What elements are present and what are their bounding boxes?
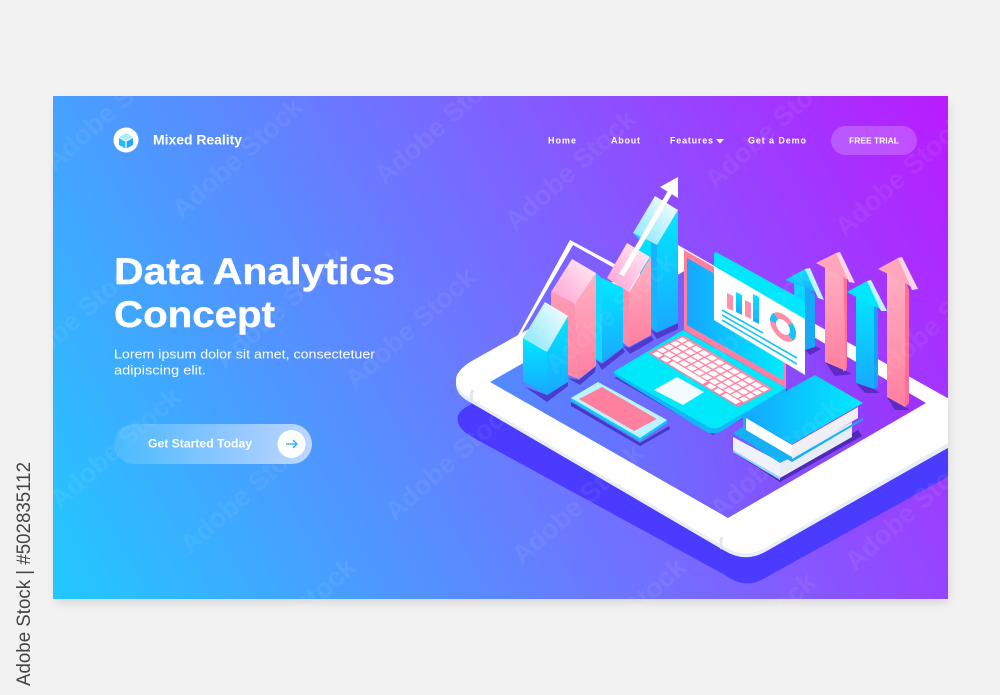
laptop screen bbox=[684, 250, 786, 388]
tablet shadow bbox=[458, 404, 948, 584]
trend line back bbox=[518, 240, 615, 335]
books bbox=[733, 375, 863, 482]
bar 1 bbox=[523, 302, 568, 395]
trend arrow bbox=[619, 177, 678, 276]
laptop shadow bbox=[615, 372, 790, 435]
mini text lines bbox=[722, 310, 797, 364]
watermarks: Adobe Stock bbox=[704, 391, 847, 524]
touchpad bbox=[654, 377, 704, 405]
watermarks: Adobe Stock bbox=[549, 551, 692, 684]
logo bbox=[114, 128, 243, 152]
icon: dropdown caret bbox=[716, 139, 724, 144]
tablet body bbox=[456, 245, 960, 557]
description: adipiscing elit. bbox=[114, 364, 206, 378]
upper book bbox=[743, 375, 863, 462]
book shadow bbox=[733, 430, 862, 482]
keyboard bbox=[648, 335, 773, 407]
button label: Get Started Today bbox=[148, 438, 253, 450]
panel shadow bbox=[56, 102, 948, 602]
icon: cube bbox=[119, 133, 133, 148]
navigation bbox=[548, 126, 917, 155]
nav: demo: Get a Demo bbox=[748, 136, 806, 146]
phone bbox=[571, 382, 670, 446]
arrow: cyan 2 bbox=[847, 280, 887, 389]
watermarks: Adobe Stock bbox=[4, 251, 147, 384]
bar chart bbox=[518, 177, 678, 402]
logo badge bbox=[114, 128, 138, 152]
bar 2 bbox=[551, 259, 596, 379]
title bbox=[114, 251, 395, 335]
nav: features: Features bbox=[670, 136, 713, 146]
watermarks: Adobe Stock bbox=[674, 261, 817, 394]
title: Data Analytics bbox=[114, 251, 395, 292]
arrows bbox=[785, 252, 918, 410]
watermarks: Adobe Stock bbox=[539, 246, 682, 379]
mini bar chart bbox=[727, 292, 759, 324]
bar 5 bbox=[633, 196, 678, 332]
arrow: cyan back bbox=[785, 268, 824, 350]
watermarks: Adobe Stock bbox=[174, 426, 317, 559]
watermarks: Adobe Stock bbox=[506, 437, 649, 570]
arrow: pink 2 bbox=[878, 257, 918, 407]
watermarks: Adobe Stock bbox=[699, 61, 842, 194]
bar shadows bbox=[525, 323, 678, 402]
watermarks: Adobe Stock bbox=[369, 57, 512, 190]
title: Concept bbox=[114, 294, 275, 335]
watermarks: Adobe Stock bbox=[379, 393, 522, 526]
watermarks: Adobe Stock bbox=[829, 109, 972, 242]
arrow: pink 1 bbox=[816, 252, 855, 372]
laptop bbox=[613, 250, 790, 435]
description bbox=[114, 348, 375, 378]
watermarks: Adobe Stock bbox=[219, 551, 362, 684]
panel: hero background bbox=[53, 96, 948, 599]
watermarks: Adobe Stock bbox=[499, 103, 642, 236]
watermarks: Adobe Stock bbox=[339, 261, 482, 394]
watermarks: Adobe Stock bbox=[44, 381, 187, 514]
watermarks: Adobe Stock bbox=[39, 43, 182, 176]
laptop base bbox=[614, 330, 786, 430]
stock id caption: Adobe Stock | #502835112 bbox=[14, 462, 35, 686]
free trial button bbox=[831, 126, 917, 155]
watermarks: Adobe Stock bbox=[839, 443, 982, 576]
description: Lorem ipsum dolor sit amet, consectetuer bbox=[114, 348, 375, 362]
arrow shadows bbox=[805, 346, 910, 410]
brand name: Mixed Reality bbox=[153, 132, 243, 148]
watermarks: Adobe Stock bbox=[209, 241, 352, 374]
illustration: isometric tablet with analytics objects bbox=[456, 177, 960, 583]
nav: home: Home bbox=[548, 136, 576, 146]
tablet screen bbox=[490, 266, 926, 518]
free trial button: FREE TRIAL bbox=[849, 136, 899, 146]
donut chart bbox=[773, 312, 793, 342]
nav: about: About bbox=[611, 136, 640, 146]
icon: arrow bbox=[278, 430, 306, 458]
dashboard card bbox=[714, 252, 805, 375]
call to action button bbox=[114, 424, 312, 464]
watermarks: Adobe Stock bbox=[166, 91, 309, 224]
bar 4 bbox=[607, 243, 651, 347]
bar 3 bbox=[596, 273, 623, 363]
lower book bbox=[733, 422, 852, 480]
